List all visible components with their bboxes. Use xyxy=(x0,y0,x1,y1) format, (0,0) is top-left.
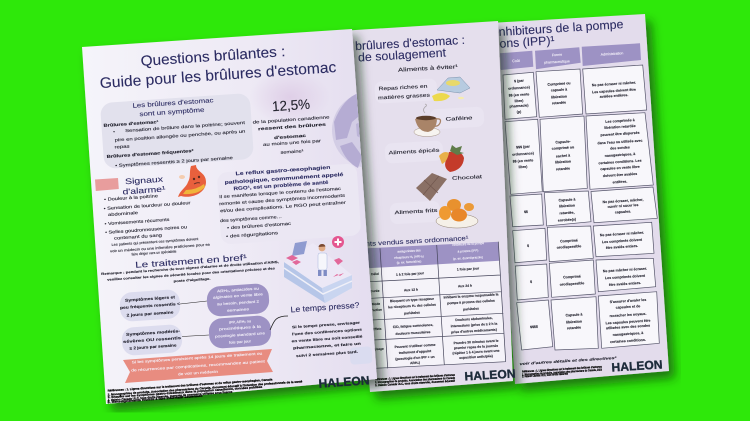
table body text: Douleurs abdominales, xyxy=(455,316,493,322)
table header text: antagonistes des xyxy=(397,248,421,254)
table body text xyxy=(370,266,500,365)
GERD heading: Le reflux gastro-œsophagien xyxy=(235,165,331,177)
GERD heading: RGO¹, est un problème de santé xyxy=(233,180,329,192)
warning signs list: abdominale xyxy=(108,210,139,217)
heading: warning signs: d'alarme¹ xyxy=(122,185,166,196)
food: chocolate: Chocolat xyxy=(452,174,483,182)
page 3: proton pump inhibitors table xyxy=(490,14,669,384)
table text: pharmaceutical form column: Capsule à xyxy=(565,312,583,318)
heading: proton pump inhibitors xyxy=(498,17,624,51)
table text: pharmaceutical form column: comprimé ou xyxy=(552,145,574,151)
statistic: 12.5%: au moins une fois par xyxy=(263,138,322,147)
food: fried foods: Aliments frits xyxy=(394,208,438,216)
table body text: prise d'autres médicaments) xyxy=(451,328,497,334)
table body text: Usage xyxy=(374,347,384,351)
table header text: (p. ex. famotidine) xyxy=(397,259,421,265)
table text: pharmaceutical form column: Capsule- xyxy=(555,140,571,144)
footnotes: 5. Renseignements fournis à titre informatif seulement xyxy=(107,394,203,404)
table text: administration column: capsules et de xyxy=(616,304,640,310)
panel: GERD explanation xyxy=(217,163,361,245)
table text: pharmaceutical form column: retardée xyxy=(556,167,570,171)
ribbon: persistent symptoms xyxy=(123,349,273,383)
table text: cost column: $$ (en vente xyxy=(513,158,533,164)
table body text: pariétales xyxy=(463,307,479,311)
table text: pharmaceutical form column: orodispersible xyxy=(557,244,581,250)
OTC medications table xyxy=(367,241,506,368)
warning signs list: contenant du sang xyxy=(114,232,163,241)
table header text: (p. ex. ésoméprazole) xyxy=(453,255,483,261)
node: mild symptoms: peu fréquents ressentis < xyxy=(120,301,181,310)
warning signs list: • Vomissements récurrents xyxy=(104,217,170,226)
table text: cost column: $$ (en vente xyxy=(509,92,529,98)
GERD body text: Il se manifeste lorsque le contenu de l'estomac xyxy=(219,186,342,199)
table text: pharmaceutical form column: retardée xyxy=(552,101,566,105)
table text: administration column: Les capsules doivent être xyxy=(592,88,636,94)
table text: administration column: Ne pas écraser, mâcher, xyxy=(602,198,644,204)
statistic: 12.5%: semaine¹ xyxy=(280,148,304,155)
table body text: interactions (prise de ≥ 2 h la xyxy=(451,322,498,328)
table text: cost column: $ xyxy=(530,280,532,284)
table text: administration column: certaines conditions. Les xyxy=(598,159,642,165)
ribbon: persistent symptoms: Si les symptômes persistent après 14 jours de traitement ou xyxy=(132,352,262,364)
table text: pharmaceutical form column: Comprimé xyxy=(560,238,578,244)
table header text: à protons (IPP) xyxy=(457,248,479,254)
table body text: premier repas de la journée xyxy=(454,344,498,350)
food: caffeine: Caféine xyxy=(445,115,473,123)
icon: stomach xyxy=(178,165,206,197)
table text: cost column: libre) xyxy=(514,99,524,103)
table text: administration column: des sondes xyxy=(610,145,630,151)
node: mild treatment: alginates en vente libre xyxy=(213,292,263,300)
treatment note: veuillez consulter les signes de sécurité locales pour des orientations précises et des xyxy=(107,266,275,282)
panel: heartburn is a symptom xyxy=(100,93,254,169)
warning signs list xyxy=(103,193,210,257)
table body text: d'action xyxy=(370,308,382,312)
statistic: 12.5%: de la population canadienne xyxy=(252,114,330,125)
panel body text: Sensation de brûlure dans la poitrine; souvent xyxy=(125,120,246,133)
table body text: (répéter 1 à 4 jours avant une xyxy=(452,349,500,355)
statistic: 12.5%: 12,5% xyxy=(271,96,311,114)
food: fried foods xyxy=(389,199,478,228)
illustration: pharmacist on platform xyxy=(284,236,352,303)
statistic: 12.5%: ressent des brûlures xyxy=(258,122,327,131)
pressed for time text: suivi 2 semaines plus tard. xyxy=(296,350,358,358)
node: mild treatment xyxy=(206,283,270,317)
decorative note blob xyxy=(349,346,373,365)
table text: pharmaceutical form column: libération xyxy=(559,203,575,209)
footnotes xyxy=(107,377,303,404)
ribbon: persistent symptoms: de voir un médecin xyxy=(178,370,218,376)
table body text: 1 fois par jour xyxy=(457,266,480,272)
table text: administration column: capsules. xyxy=(615,209,631,215)
table body text: Durée xyxy=(370,289,380,293)
table text: administration column: capsules en vente libre xyxy=(600,165,640,171)
GERD body text xyxy=(219,186,347,239)
warning signs list: • Sensation de lourdeur ou douleur xyxy=(103,200,191,211)
food: fatty meals xyxy=(374,77,470,104)
table body text: les récepteurs H₂ des cellules xyxy=(388,303,436,309)
table text: administration column: Les capsules peuvent être xyxy=(605,319,651,325)
logo: Haleon: HALEON xyxy=(611,357,663,375)
table text: cost column: $$ xyxy=(524,210,528,214)
table text: administration column: nasogastriques, à xyxy=(613,331,643,337)
table text: cost column xyxy=(508,79,538,329)
table header row: Forme xyxy=(552,53,562,57)
table text: administration column: Ne pas écraser ni mâcher. xyxy=(600,231,644,237)
footnotes: 3. Haleon Canada ULC, tous droits réservés, document éducatif xyxy=(375,379,455,387)
title: Questions brûlantes : xyxy=(140,44,286,70)
table body text: pariétales xyxy=(404,311,420,315)
GERD heading: pathologique, communément appelé xyxy=(224,172,344,186)
panel body text: • xyxy=(113,129,115,134)
GERD body text: et/ou des complications. Le RGO peut entraîner xyxy=(220,200,347,213)
heading: relief options: brûlures d'estomac : xyxy=(355,33,465,53)
heading: warning signs xyxy=(122,175,166,196)
ribbon: persistent symptoms: de récurrences par complications, recommandez au patient xyxy=(131,359,265,373)
pressed for time text: pharmacienne, et faire un xyxy=(293,342,361,350)
treatment note: Remarque : pendant la recherche de tous signes d'alarme et de droits utilisation d'AINS, xyxy=(101,260,279,276)
table body text: Aux 12 h xyxy=(404,288,418,292)
table text: administration column: nasogastriques, à xyxy=(605,152,635,158)
node: moderate treatment: procinétiques à la xyxy=(219,325,261,331)
food: caffeine xyxy=(414,104,485,136)
warning signs list: • Douleur à la poitrine xyxy=(104,193,159,202)
heading: relief options: de soulagement xyxy=(358,45,447,65)
table text: pharmaceutical form column: Capsule à xyxy=(558,197,576,203)
footnotes: Références : 1. Lignes directrices sur le traitement des brûlures d'estomac xyxy=(375,373,455,381)
node: moderate symptoms xyxy=(121,324,183,356)
table text: administration column: Ne pas écraser ni mâcher. xyxy=(592,81,636,87)
node: moderate treatment: IPP, ARH₂ ou xyxy=(229,319,251,325)
food: fatty meals: Repas riches en xyxy=(378,84,428,92)
table text: administration column: utilisées avec des sondes xyxy=(606,324,650,330)
table text: pharmaceutical form column: libération xyxy=(551,94,567,100)
logo: Haleon: HALEON xyxy=(464,367,516,383)
warning signs list: faire diriger vers un spécialiste xyxy=(131,249,177,257)
table body text: exposition anticipée) xyxy=(459,354,493,360)
panel body text: Brûlures d'estomac¹ xyxy=(103,119,159,128)
warning signs list: Les patients qui présentent ces symptômes doivent xyxy=(111,237,199,247)
GERD heading xyxy=(224,165,344,192)
table text: administration column: Les comprimés doivent xyxy=(605,274,646,280)
table text: cost column: (p) xyxy=(517,110,522,114)
treatment note: poste d'aiguillage. xyxy=(173,277,211,283)
table text: pharmaceutical form column: orodispersible xyxy=(560,281,584,287)
pressed for time text: en vente libre ou soit conseillé xyxy=(291,335,363,343)
table text: administration column: S'assurer d'avaler les xyxy=(610,298,646,304)
table text: pharmaceutical form column: retardée xyxy=(567,326,581,330)
table body text: Inhibent la enzyme responsable la xyxy=(443,292,499,300)
table text: administration column: ouvrir ni sucer les xyxy=(607,203,639,209)
table body text: Effets xyxy=(372,327,382,331)
table text: cost column: $$$$ xyxy=(530,325,538,329)
table text: cost column: libre) xyxy=(518,165,528,169)
table body text: Aux 24 h xyxy=(458,284,472,288)
table text: cost column: ordonnance) xyxy=(508,85,531,91)
table text: administration column: libération retardée xyxy=(604,124,636,130)
table text: administration column: avalées entières. xyxy=(600,93,628,99)
panel body text: • Symptômes ressentis ≥ 2 jours par semaine xyxy=(115,155,234,168)
table header row: Coût xyxy=(512,59,520,63)
icon: warning flag xyxy=(95,178,119,191)
table text: administration column: certaines conditions. xyxy=(610,338,646,344)
page 2: relief options xyxy=(340,21,516,392)
food: spicy foods xyxy=(384,140,464,172)
treatment note xyxy=(101,260,279,283)
table text: administration column: être avalés entiers. xyxy=(606,244,638,250)
table text: administration column xyxy=(592,81,651,344)
logo: Haleon: HALEON xyxy=(318,373,370,391)
table text: pharmaceutical form column: sachet à xyxy=(556,154,570,158)
footnotes: Références : 1. Lignes directrices sur le traitement des brûlures d'estomac et du reflux gastro-œsophagien, Canada xyxy=(108,377,273,393)
arrow: to pressed for time xyxy=(270,316,288,330)
statistic: 12.5%: d'estomac xyxy=(274,133,307,140)
table header row: pharmaceutique xyxy=(544,59,570,65)
GERD body text: • des régurgitations xyxy=(226,230,278,239)
table body text: Délai xyxy=(371,272,379,276)
heading: treatment in brief: Le traitement en bref¹ xyxy=(135,252,247,270)
table text: cost column: $ (par xyxy=(514,79,525,83)
footnotes xyxy=(522,364,602,378)
node: mild symptoms: 2 jours par semaine xyxy=(126,309,175,318)
node: moderate symptoms: Symptômes modérés- xyxy=(126,328,181,337)
heading: relief options xyxy=(355,33,465,65)
pressed for time text: Si le temps presse, envisager xyxy=(292,321,361,329)
node: moderate treatment: posologie standard une xyxy=(215,331,265,339)
table body text: traitement d'appoint xyxy=(399,349,432,355)
table body text: Mode xyxy=(372,302,380,306)
table body text: 1 à 2 fois par jour xyxy=(396,271,425,277)
table text: administration column: recracher les noyaux. xyxy=(609,312,647,318)
footnotes: 2. Monographies de produits. Association des pharmaciens du Canada, 2023 xyxy=(522,367,602,377)
table text: administration column: peuvent être dispersés xyxy=(600,131,640,137)
table header text: Inhibiteurs de la pompe xyxy=(452,241,484,247)
subheading: OTC medications: nts vendus sans ordonnance¹ xyxy=(365,235,470,248)
warning signs list: voir un médecin ou une infirmière praticienne pour se xyxy=(110,243,210,253)
panel body text xyxy=(103,119,246,168)
node: moderate symptoms: sévères OU ressentis xyxy=(123,335,182,344)
table text: administration column: dans l'eau ou utilisés avec xyxy=(597,139,643,145)
food: chocolate xyxy=(416,173,483,201)
table text: administration column: Les comprimés à xyxy=(605,118,635,124)
table text: pharmaceutical form column: Comprimé ou xyxy=(547,81,571,87)
panel heading xyxy=(132,97,215,118)
table header row xyxy=(500,43,641,70)
footnotes: 4. Haleon Canada ULC, tous droits réservés, marques de commerce utilisées sous licence xyxy=(108,390,233,402)
panel heading: sont un symptôme xyxy=(139,107,205,118)
footnotes: 2. Monographies de produits. Association des pharmaciens du Canada, document éducatif à l'intention des professionnels de la santé xyxy=(108,379,303,397)
table text: pharmaceutical form column: libération xyxy=(566,319,582,325)
table text: administration column: entières. xyxy=(612,180,628,184)
table header row: Administration xyxy=(601,51,623,57)
table body text: ARH₂) xyxy=(410,361,420,365)
GERD body text: • des brûlures d'estomac xyxy=(227,221,292,230)
panel heading: Les brûlures d'estomac xyxy=(132,97,215,110)
footer note: voir d'autres détails et des directives² xyxy=(519,356,618,366)
heading: warning signs: Signaux xyxy=(125,175,163,186)
page 1: burning questions guide xyxy=(82,29,408,404)
node: mild treatment: ARH₂, antiacides ou xyxy=(217,287,259,293)
GERD body text: remonte et cause des symptômes incommodants xyxy=(219,193,345,206)
panel body text: pire en position allongée ou penchée, ou après un xyxy=(114,129,246,142)
table text: pharmaceutical form column: capsule à xyxy=(551,87,567,93)
table text: pharmaceutical form column: retardée, xyxy=(559,211,575,215)
footnotes: 3. Haleon Canada ULC, tous droits réservés xyxy=(522,372,568,378)
footnotes: 2. Monographies de produits. Association des pharmaciens du Canada xyxy=(375,376,455,384)
node: moderate treatment: fois par jour xyxy=(229,339,252,345)
heading: proton pump inhibitors: nhibiteurs de la pompe xyxy=(498,17,624,39)
table text: pharmaceutical form column: enrobée(s) xyxy=(558,217,577,223)
node: mild symptoms xyxy=(119,289,181,322)
table body text: C/D, fatigue somnolence, xyxy=(393,323,433,329)
table body text: pompe à protons des cellules xyxy=(447,299,495,305)
food: spicy foods: Aliments épicés xyxy=(388,148,440,156)
subheading: foods to avoid: Aliments à éviter¹ xyxy=(398,64,458,74)
statistic: 12.5% xyxy=(252,96,330,155)
table text: cost column: $$$ (par xyxy=(516,145,531,149)
food: fatty meals: matières grasses xyxy=(378,92,431,102)
arrow: moderate to treatment xyxy=(182,335,209,336)
table body text: Peuvent n'utiliser comme xyxy=(394,343,436,349)
table header text: récepteurs H₂ (ARH₂) xyxy=(394,254,424,260)
title: Guide pour les brûlures d'estomac xyxy=(99,59,337,92)
footnotes: Références : 1. Lignes directrices sur le traitement des brûlures d'estomac xyxy=(522,364,602,374)
warning signs list: • Selles goudronneuses noires ou xyxy=(105,224,188,235)
heading: pressed for time: Le temps presse? xyxy=(290,301,360,314)
node: moderate treatment xyxy=(208,315,272,349)
table text: pharmaceutical form column: Comprimé xyxy=(563,274,581,280)
icon: globe xyxy=(262,78,362,168)
table text: cost column: pharmacie) xyxy=(509,103,529,109)
table body text: Bloquent un type récepteur xyxy=(390,297,435,303)
table body text: Prendre 30 minutes avant le xyxy=(453,339,499,345)
table text: administration column: être avalés entiers. xyxy=(609,281,641,287)
table body text: douleurs musculaires xyxy=(395,330,431,336)
node: mild treatment: au besoin, pendant 2 xyxy=(217,300,259,306)
node: mild treatment: semaines xyxy=(227,307,249,313)
pressed for time text xyxy=(291,321,363,358)
heading: proton pump inhibitors: ons (IPP)¹ xyxy=(499,33,555,51)
arrow: mild to treatment xyxy=(180,301,207,304)
footnotes xyxy=(375,373,455,387)
table text: pharmaceutical form column xyxy=(547,81,584,330)
table text: cost column: ordonnance) xyxy=(512,151,535,157)
title xyxy=(99,44,337,92)
table body text: (posologie d'un IPP + un xyxy=(395,355,435,361)
pressed for time text: l'une des conférences options xyxy=(292,328,362,336)
table text: administration column: Ne pas mâcher ni écraser. xyxy=(603,267,647,273)
table cells xyxy=(503,65,659,350)
panel body text: repas xyxy=(114,143,130,150)
footnotes: 3. Enquête sur les symptômes gastro-intestinaux dans la population canadienne, données publiées xyxy=(108,385,263,399)
table text: administration column: doivent être avalées xyxy=(603,172,637,178)
table text: cost column: $ xyxy=(527,244,529,248)
node: moderate symptoms: ≥ 2 jours par semaine xyxy=(129,342,177,351)
GERD body text: des symptômes comme… xyxy=(220,214,282,223)
table text: administration column: Les comprimés doivent xyxy=(602,238,643,244)
panel body text: Brûlures d'estomac fréquentes² xyxy=(106,148,194,159)
table text: pharmaceutical form column: libération xyxy=(555,159,571,165)
node: mild symptoms: Symptômes légers et xyxy=(125,294,176,303)
table header text xyxy=(394,241,484,265)
